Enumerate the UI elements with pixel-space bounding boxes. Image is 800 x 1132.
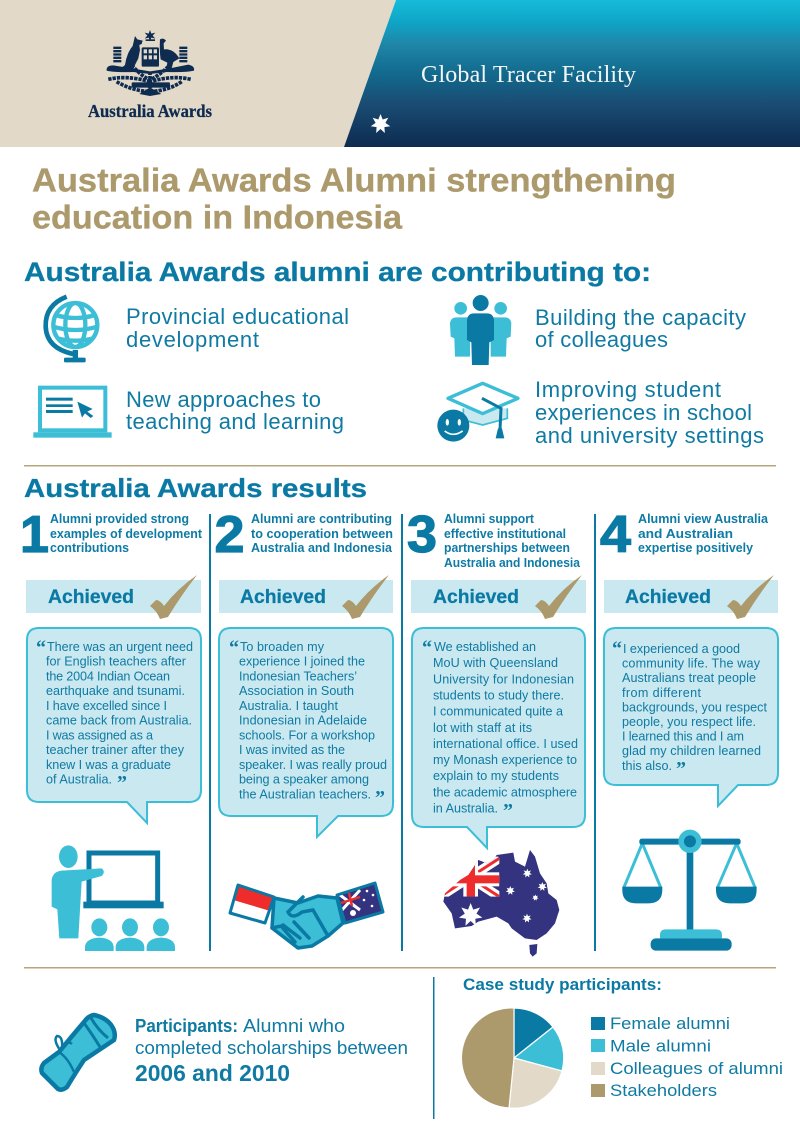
section heading: contributing: Australia Awards alumni are contributing to:	[24, 257, 651, 287]
item text: new approaches: New approaches to	[126, 387, 321, 412]
item text: capacity: Building the capacity	[535, 305, 746, 330]
quote text: “	[612, 638, 622, 660]
result 1 heading: Alumni provided strong	[50, 512, 189, 526]
logo wordmark: Australia Awards	[88, 101, 212, 121]
speech bubble	[604, 628, 778, 806]
legend: Stakeholders	[610, 1081, 717, 1100]
icon: graduation cap with smiley	[437, 383, 518, 442]
panel: result 4	[600, 506, 778, 951]
main title	[32, 162, 676, 236]
Australian flag cuff	[337, 883, 383, 923]
quote text: “	[422, 637, 432, 659]
result 2 heading	[251, 512, 393, 555]
quote text: students to study there.	[433, 688, 564, 702]
quote text: people, you respect life.	[622, 715, 756, 729]
quote text: ”	[117, 772, 127, 794]
section heading: results: Australia Awards results	[24, 473, 367, 503]
quote text: from different	[622, 686, 702, 700]
quote text: international office. I used	[433, 737, 578, 751]
result 1 heading	[50, 512, 203, 555]
quote text: Indonesian Teachers’	[239, 670, 357, 684]
quote text: schools. For a workshop	[239, 728, 375, 742]
legend: Male alumni	[610, 1036, 711, 1056]
quote text: my Monash experience to	[433, 753, 577, 767]
quote text: being a speaker among	[239, 773, 369, 787]
quote text: I learned this and I am	[622, 730, 744, 744]
achieved band: Achieved	[433, 587, 519, 608]
legend	[591, 1014, 783, 1100]
result 2 heading: to cooperation between	[251, 527, 393, 541]
quote text: “	[229, 637, 239, 659]
quote text: the academic atmosphere	[433, 785, 577, 799]
participants text: Alumni who	[243, 1016, 345, 1036]
quote text: University for Indonesian	[433, 672, 574, 686]
header: beige logo panel	[0, 0, 396, 147]
icon: laptop with cursor	[33, 388, 112, 438]
quote text: I communicated quite a	[433, 705, 563, 719]
quote text: ”	[676, 758, 686, 780]
participants text: completed scholarships between	[135, 1038, 408, 1058]
item text: new approaches: teaching and learning	[126, 409, 344, 434]
quote text	[422, 637, 578, 822]
quote text: ”	[375, 787, 385, 809]
icon: handshake with flags	[230, 883, 383, 948]
header banner	[0, 0, 800, 147]
speech bubble	[219, 628, 393, 837]
icon: globe	[46, 297, 97, 362]
result 3 heading: effective institutional	[444, 527, 566, 541]
quote text: ”	[503, 800, 513, 822]
quote text: earthquake and tsunami.	[46, 684, 185, 698]
item text: provincial: development	[126, 327, 259, 352]
quote text	[36, 637, 193, 794]
main title: education in Indonesia	[32, 198, 403, 236]
participants text: 2006 and 2010	[135, 1060, 290, 1086]
quote text: backgrounds, you respect	[622, 700, 768, 714]
item text: new approaches	[126, 387, 344, 434]
result 4 heading: expertise positively	[638, 541, 753, 555]
quote text: MoU with Queensland	[433, 656, 558, 670]
quote text: I was assigned as a	[46, 728, 153, 742]
quote text: for English teachers after	[46, 655, 186, 669]
quote text: We established an	[434, 640, 536, 654]
quote text: To broaden my	[240, 640, 325, 654]
quote text: experience I joined the	[239, 655, 365, 669]
icon: balance scales	[622, 830, 757, 951]
result 3 heading: Alumni support	[444, 512, 535, 526]
item text: provincial	[126, 304, 349, 352]
result 3 heading	[444, 512, 581, 570]
achieved band: Achieved	[48, 587, 134, 608]
quote text: I have excelled since I	[46, 699, 167, 713]
number 3: 3	[407, 506, 437, 564]
quote text: community life. The way	[622, 657, 761, 671]
item text: student experiences	[535, 377, 764, 448]
item text: capacity: of colleagues	[535, 327, 668, 352]
result 4 heading: Alumni view Australia	[638, 512, 769, 526]
item text: student experiences: experiences in school	[535, 400, 752, 425]
quote text: Australians treat people	[622, 671, 756, 685]
panel: result 2	[214, 506, 393, 948]
quote text: the Australian teachers.	[239, 787, 371, 801]
item text: student experiences: and university settings	[535, 423, 764, 448]
quote text: I was invited as the	[239, 743, 345, 757]
quote text: I experienced a good	[623, 642, 740, 656]
quote text: explain to my students	[433, 769, 559, 783]
icon: Australia map with flag	[440, 850, 559, 957]
legend: Female alumni	[610, 1014, 730, 1033]
icon: teacher at board with students	[52, 845, 175, 951]
quote text: came back from Australia.	[46, 714, 192, 728]
result 3 heading: Australia and Indonesia	[444, 556, 581, 570]
quote text: glad my children learned	[622, 744, 761, 758]
icon: Australian coat of arms	[107, 30, 194, 96]
achieved band	[604, 575, 778, 619]
result 2 heading: Australia and Indonesia	[251, 541, 393, 555]
quote text: this also.	[622, 759, 672, 773]
achieved band	[26, 575, 201, 619]
quote text: teacher trainer after they	[46, 743, 185, 757]
number 1: 1	[20, 506, 49, 564]
pie chart	[461, 1008, 564, 1108]
participants text	[135, 1016, 408, 1086]
panel: result 3	[407, 506, 586, 957]
panel: result 1	[20, 506, 203, 951]
Indonesian flag cuff	[230, 885, 274, 923]
quote text: in Australia.	[433, 802, 498, 816]
quote text: knew I was a graduate	[46, 758, 171, 772]
icon: diploma scroll	[41, 1015, 115, 1090]
main title: Australia Awards Alumni strengthening	[32, 162, 676, 198]
result 3 heading: partnerships between	[444, 541, 570, 555]
legend: Colleagues of alumni	[610, 1059, 783, 1078]
item text: provincial: Provincial educational	[126, 304, 349, 329]
quote text: the 2004 Indian Ocean	[46, 670, 170, 684]
icon: three people	[450, 295, 511, 365]
header: blue gradient panel	[344, 0, 800, 147]
speech bubble	[27, 628, 201, 823]
header title: Global Tracer Facility	[421, 62, 636, 88]
quote text: Indonesian in Adelaide	[239, 714, 367, 728]
result 1 heading: contributions	[50, 541, 129, 555]
number 4: 4	[600, 506, 631, 564]
quote text: lot with staff at its	[433, 721, 532, 735]
quote text: speaker. I was really proud	[239, 758, 387, 772]
clasped hands	[272, 896, 343, 948]
quote text	[229, 637, 387, 809]
quote text: There was an urgent need	[47, 640, 193, 654]
achieved band	[219, 575, 393, 619]
achieved band	[411, 575, 586, 619]
quote text: of Australia.	[46, 773, 112, 787]
case study heading: Case study participants:	[463, 976, 662, 994]
result 4 heading	[638, 512, 769, 555]
achieved band: Achieved	[240, 587, 326, 608]
speech bubble	[412, 628, 585, 848]
quote text: Association in South	[239, 684, 354, 698]
participants text: Participants:	[135, 1016, 238, 1036]
item text: capacity	[535, 305, 746, 352]
result 1 heading: examples of development	[50, 527, 203, 541]
result 2 heading: Alumni are contributing	[251, 512, 392, 526]
item text: student experiences: Improving student	[535, 377, 721, 402]
achieved band: Achieved	[625, 587, 711, 608]
quote text: “	[36, 637, 46, 659]
quote text: Australia. I taught	[239, 699, 338, 713]
number 2: 2	[214, 506, 244, 564]
icon: seven-point star	[371, 114, 390, 133]
result 4 heading: and Australian	[638, 527, 733, 541]
quote text	[612, 638, 768, 780]
